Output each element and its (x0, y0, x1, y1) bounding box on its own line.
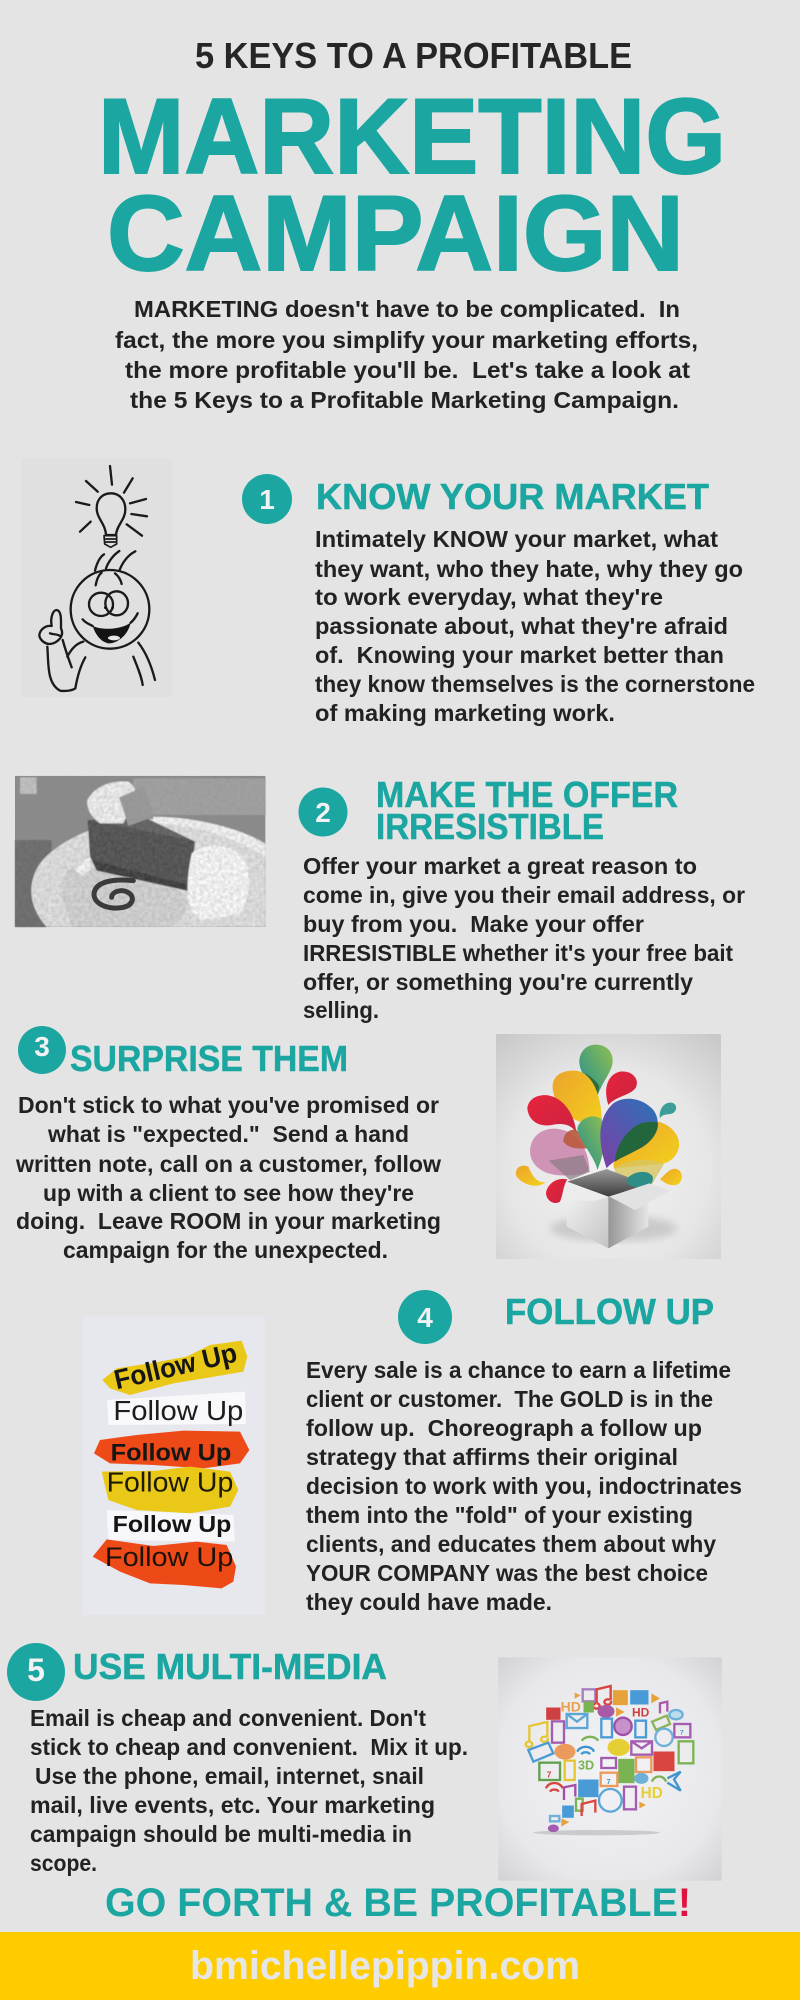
text block: key 1: they know themselves is the cornerstone (315, 671, 755, 697)
heading: make the offer irresistible: MAKE THE OFFER (376, 774, 678, 815)
text block: key 2: buy from you. Make your offer (303, 911, 644, 937)
intro text: fact, the more you simplify your marketing efforts, (115, 327, 698, 353)
number badge 5: 5 (27, 1652, 45, 1688)
text block: key 4: decision to work with you, indoctrinates (306, 1473, 742, 1499)
text block: key 1: to work everyday, what they're (315, 584, 663, 610)
image: speech bubble of media icons: 7 (680, 1730, 684, 1737)
text block: key 5: campaign should be multi-media in (30, 1821, 412, 1847)
text block: key 4: them into the "fold" of your existing (306, 1502, 693, 1528)
number badge 1 (242, 474, 292, 524)
text block: key 1: passionate about, what they're afraid (315, 613, 728, 639)
text block: key 2 (303, 853, 745, 1023)
text block: key 3: doing. Leave ROOM in your marketing (16, 1208, 441, 1234)
footer url: bmichellepippin.com (190, 1944, 580, 1988)
title: campaign: CAMPAIGN (107, 173, 684, 293)
number badge 1: 1 (259, 484, 275, 515)
footer band (0, 1932, 800, 2000)
panel: key 2 make the offer irresistible (15, 774, 745, 1023)
panel: key 5 use multi-media (7, 1643, 722, 1881)
heading: know your market: KNOW YOUR MARKET (316, 476, 709, 517)
icon labels (561, 1698, 663, 1802)
number badge 2 (298, 788, 348, 836)
title: kicker: 5 KEYS TO A PROFITABLE (195, 35, 632, 76)
text block: key 4: Every sale is a chance to earn a lifetime (306, 1357, 731, 1383)
intro text: the more profitable you'll be. Let's take a look at (125, 357, 690, 383)
panel: key 3 surprise them (15, 1026, 721, 1263)
text block: key 3 (15, 1092, 442, 1263)
strip 3 (94, 1431, 249, 1468)
text block: key 1 (315, 526, 755, 726)
strip 3: Follow Up (111, 1440, 231, 1467)
text block: key 5: mail, live events, etc. Your marketing (30, 1792, 435, 1818)
image: chocolate cake photo (15, 776, 265, 927)
text block: key 4 (306, 1357, 742, 1615)
text block: key 4: strategy that affirms their original (306, 1444, 678, 1470)
heading: use multi-media: USE MULTI-MEDIA (73, 1646, 387, 1687)
strip 6: Follow Up (105, 1542, 233, 1572)
text block: key 4: follow up. Choreograph a follow up (306, 1415, 702, 1441)
text block: key 3: written note, call on a customer, follow (15, 1151, 442, 1177)
text block: key 3: what is "expected." Send a hand (47, 1121, 409, 1147)
image: torn paper follow up strips (82, 1317, 265, 1615)
number badge 4 (398, 1290, 452, 1344)
text block: key 5: scope. (30, 1850, 97, 1876)
intro text: MARKETING doesn't have to be complicated. In (134, 296, 680, 322)
text block: key 4: clients, and educates them about why (306, 1531, 716, 1557)
icon labels: HD (561, 1698, 581, 1714)
text block: key 3: up with a client to see how they're (43, 1180, 414, 1206)
text block: key 3: campaign for the unexpected. (63, 1237, 388, 1263)
heading: follow up: FOLLOW UP (505, 1291, 714, 1332)
text block: key 2: come in, give you their email address, or (303, 882, 745, 908)
number badge 5 (7, 1643, 65, 1701)
image: gift box with colourful splashes (496, 1034, 721, 1259)
panel: key 1 know your market (22, 458, 755, 726)
strip 4: Follow Up (107, 1466, 233, 1497)
header (98, 35, 726, 293)
strip 4 (102, 1466, 238, 1513)
strip 5: Follow Up (113, 1511, 231, 1537)
heading: make the offer irresistible (376, 774, 678, 847)
strip 6 (93, 1539, 236, 1588)
text block: key 5 (30, 1705, 468, 1876)
text block: key 1: of. Knowing your market better than (315, 642, 724, 668)
number badge 4: 4 (417, 1302, 433, 1333)
icon labels: HD (641, 1785, 663, 1802)
title: marketing: MARKETING (98, 76, 726, 196)
number badge 3: 3 (34, 1031, 50, 1062)
icon labels: HD (632, 1706, 650, 1720)
text block: key 5: Use the phone, email, internet, snail (35, 1763, 424, 1789)
text block: key 4: YOUR COMPANY was the best choice (306, 1560, 708, 1586)
image: cartoon with light bulb (22, 458, 173, 697)
text block: key 3: Don't stick to what you've promised or (18, 1092, 439, 1118)
number badge 2: 2 (315, 797, 331, 828)
text block: key 4: client or customer. The GOLD is in the (306, 1386, 713, 1412)
strip 2: Follow Up (113, 1395, 243, 1426)
text block: key 1: Intimately KNOW your market, what (315, 526, 718, 552)
heading: surprise them: SURPRISE THEM (70, 1038, 348, 1079)
text block: key 5: Email is cheap and convenient. Don't (30, 1705, 426, 1731)
icon labels: 3D (578, 1758, 594, 1772)
image: speech bubble of media icons: 7 (547, 1769, 552, 1779)
number badge 3 (18, 1026, 66, 1074)
intro text (115, 296, 698, 413)
image: speech bubble of media icons: 7 (607, 1777, 611, 1786)
text block: key 2: IRRESISTIBLE whether it's your free bait (303, 940, 733, 966)
closing line: GO FORTH & BE PROFITABLE! (105, 1881, 691, 1925)
text block: key 4: they could have made. (306, 1589, 552, 1615)
image: speech bubble of media icons (498, 1657, 722, 1881)
strip 1: Follow Up (111, 1337, 240, 1395)
text block: key 1: of making marketing work. (315, 700, 615, 726)
text block: key 1: they want, who they hate, why they go (315, 556, 743, 582)
text block: key 2: offer, or something you're currently (303, 969, 693, 995)
text block: key 2: Offer your market a great reason to (303, 853, 697, 879)
panel: key 4 follow up (82, 1290, 742, 1615)
heading: make the offer irresistible: IRRESISTIBLE (376, 806, 604, 847)
text block: key 5: stick to cheap and convenient. Mix it up. (30, 1734, 468, 1760)
text block: key 2: selling. (303, 997, 379, 1023)
intro text: the 5 Keys to a Profitable Marketing Campaign. (130, 387, 679, 413)
